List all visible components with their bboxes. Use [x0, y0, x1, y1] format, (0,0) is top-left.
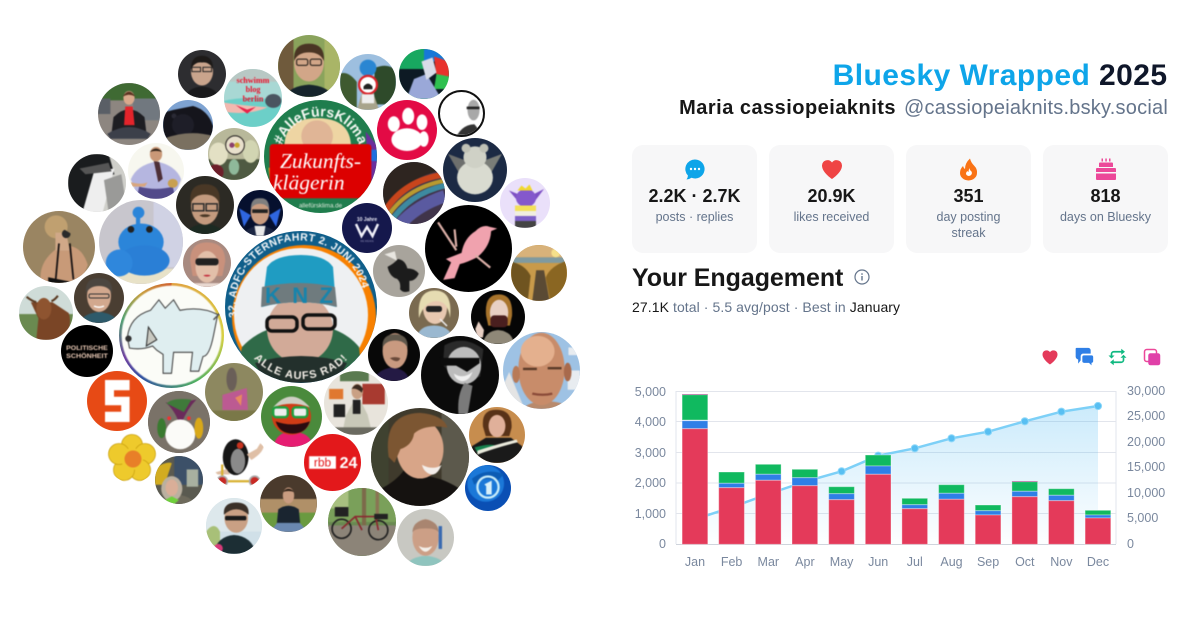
avatar: white bear with wings: [443, 138, 507, 202]
avatar: pink bird on black: [425, 205, 512, 292]
avatar: 10 Jahre W: [342, 203, 392, 253]
stacked bars: [682, 394, 1111, 544]
stat card: days on Bluesky: days on Bluesky: [1060, 210, 1151, 224]
avatar: vegetable face: [148, 391, 210, 453]
bar: Oct: [1012, 481, 1038, 544]
avatar: woman lying: [469, 407, 525, 463]
avatar: rbb24: rbb: [314, 455, 332, 469]
month labels: Feb: [721, 555, 742, 569]
avatar: dial with colours: [208, 128, 260, 180]
right axis labels: 15,000: [1127, 460, 1165, 474]
left axis labels: 2,000: [635, 476, 666, 490]
avatar: Politische Schoenheit: POLITISCHE: [66, 345, 108, 352]
bar: Mar: [755, 464, 781, 544]
left axis labels: 3,000: [635, 446, 666, 460]
avatar: window detail: [68, 154, 126, 212]
avatar: black panther: [163, 100, 213, 150]
avatar: Zukunftsklaegerin: #AlleFürsKlima: [274, 106, 366, 145]
month labels: May: [830, 555, 854, 569]
avatar: man sitting outside: [260, 475, 317, 532]
bar: Jul: [902, 498, 928, 544]
stat card: day posting streak: streak: [951, 226, 986, 240]
month labels: Sep: [977, 555, 999, 569]
bar: Sep: [975, 505, 1001, 544]
avatar: little mole on scooter: [211, 432, 267, 488]
stat card: likes received: [769, 145, 894, 253]
month labels: Apr: [795, 555, 815, 569]
month labels: Jul: [907, 555, 923, 569]
avatar: Zukunftsklaegerin: [264, 100, 377, 213]
avatar: man dark shirt: [368, 329, 420, 381]
avatar: purple goblin: [500, 178, 550, 228]
month labels: Jun: [868, 555, 888, 569]
avatar: avatar with mask: [471, 290, 525, 344]
avatar: bird in field with bag: [205, 363, 263, 421]
right axis labels: 25,000: [1127, 409, 1165, 423]
stat card: likes received: 20.9K: [807, 186, 856, 206]
left axis labels: 5,000: [635, 385, 666, 399]
avatar: Zukunftsklaegerin: Zukunfts-: [280, 149, 361, 173]
avatar: rbb24: 24: [340, 455, 357, 472]
avatar: schwimm blog berlin: berlin: [243, 94, 264, 103]
bar: Nov: [1048, 489, 1074, 544]
stat card: day posting streak: [906, 145, 1031, 253]
avatar: bald man sky: [503, 332, 580, 409]
bar: Jun: [865, 455, 891, 544]
avatar: woman green scarf: [155, 456, 203, 504]
avatar: black and white laughing woman: [421, 336, 499, 414]
chart legend: [1042, 348, 1160, 366]
stat card: posts and replies: [632, 145, 757, 253]
avatar: blue plush monster: [99, 200, 183, 284]
avatar: bike in woods: [328, 488, 396, 556]
avatar: sunset coast: [511, 245, 567, 301]
stat card: posts and replies: 2.2K · 2.7K: [648, 186, 741, 206]
avatar: woman in office: [324, 371, 388, 435]
avatar: man with blue lights: [237, 190, 283, 236]
avatar: paw logo: [377, 100, 437, 160]
avatar: man with glasses dark: [178, 50, 226, 98]
stat card: day posting streak: day posting: [937, 210, 1000, 224]
avatar: man with tie: [128, 143, 184, 199]
icon: flame: [960, 158, 977, 180]
avatar: man in forest: [278, 35, 340, 97]
icon: heart: [822, 160, 842, 179]
avatar: rbb24: [304, 434, 361, 491]
icon: replies legend: [1076, 348, 1094, 366]
avatar: schwimm blog berlin: blog: [246, 85, 260, 94]
avatar: highland cow: [19, 286, 73, 340]
stat card: days on Bluesky: [1043, 145, 1168, 253]
stat card: days on Bluesky: 818: [1090, 186, 1121, 206]
right axis labels: [1127, 384, 1165, 551]
stat card: day posting streak: 351: [953, 186, 984, 206]
grid lines: [676, 391, 1116, 544]
heading: Your Engagement: Your Engagement: [632, 264, 843, 292]
avatar: orange S logo: [87, 371, 147, 431]
stat card: likes received: likes received: [794, 210, 869, 224]
avatar: man grey hair: [74, 273, 124, 323]
left axis labels: 0: [659, 537, 666, 551]
panel: avatar bubble cluster: [19, 35, 580, 566]
icon: quotes legend: [1144, 348, 1160, 366]
month labels: [685, 555, 1109, 569]
right axis labels: 0: [1127, 537, 1134, 551]
avatar: main profile picture: ALLE AUFS RAD!: [254, 354, 348, 380]
month labels: Aug: [940, 555, 963, 569]
left axis labels: 1,000: [635, 507, 666, 521]
bar: Apr: [792, 469, 818, 544]
icon: chat bubble: [685, 160, 705, 180]
month labels: Dec: [1087, 555, 1109, 569]
bar: Aug: [939, 485, 964, 544]
title: Bluesky Wrapped 2025: [833, 59, 1168, 92]
avatar: road sign: [340, 54, 396, 110]
month labels: Oct: [1015, 555, 1035, 569]
icon: likes legend: [1042, 350, 1058, 364]
right axis labels: 30,000: [1127, 384, 1165, 398]
avatar: tagesschau globe: [465, 465, 511, 511]
avatar: 10 Jahre W: 10 Jahre: [357, 217, 377, 223]
avatar: main profile picture: 32. ADFC-STERNFAHRT 2. JUNI 2024: [227, 232, 370, 318]
bar: Jan: [682, 394, 708, 544]
month labels: Nov: [1050, 555, 1073, 569]
avatar: rainbow: [383, 162, 445, 224]
chart: monthly engagement stacked bars with cumulative line: [635, 384, 1165, 569]
month labels: Mar: [758, 555, 779, 569]
icon: info: [854, 269, 870, 285]
left axis labels: 4,000: [635, 415, 666, 429]
avatar: woman with sunglasses: [183, 239, 231, 287]
engagement summary: 27.1K total · 5.5 avg/post · Best in January: [632, 299, 900, 315]
icon: birthday cake: [1096, 158, 1116, 180]
cumulative area: [695, 406, 1098, 544]
left axis labels: [635, 385, 666, 551]
icon: reposts legend: [1108, 348, 1126, 366]
avatar: woman short hair black turtleneck: [371, 408, 469, 506]
avatar: main profile picture: KNZ: [265, 283, 333, 308]
avatar: orange muppet: [261, 386, 322, 447]
avatar: 10 Jahre W: WE WEAVE: [360, 240, 374, 243]
avatar: Zukunftsklaegerin: allefürsklima.de: [299, 202, 343, 209]
avatar: woman from behind: [23, 211, 95, 283]
avatar: colourful woman art: [399, 49, 449, 99]
avatar: Politische Schoenheit: SCHÖNHEIT: [66, 351, 109, 360]
bar: May: [829, 487, 854, 544]
avatar: main profile picture: [225, 231, 377, 383]
bar: Dec: [1085, 510, 1111, 544]
month labels: Jan: [685, 555, 705, 569]
avatar: schwimm blog berlin: schwimm: [237, 76, 270, 85]
avatar: man sunglasses outdoors: [206, 498, 262, 554]
right axis labels: 20,000: [1127, 435, 1165, 449]
user name and handle: Maria cassiopeiaknits @cassiopeiaknits.bsky.social: [679, 97, 1168, 119]
avatar: smiling bald man: [397, 509, 454, 566]
right axis labels: 5,000: [1127, 511, 1158, 525]
avatar: flower: [107, 433, 157, 483]
avatar: Zukunftsklaegerin: klägerin: [273, 170, 345, 194]
bar: Feb: [719, 472, 744, 544]
right axis labels: 10,000: [1127, 486, 1165, 500]
cumulative line: [695, 402, 1102, 519]
avatar: black shape on glitter: [373, 245, 425, 297]
avatar: blonde with cigarette: [409, 288, 459, 338]
avatar: schwimm blog berlin: [224, 69, 282, 127]
avatar: rainbow-ring dog drawing: [119, 283, 224, 388]
avatar: woman sitting on street: [98, 83, 160, 145]
avatar: Politische Schoenheit: [61, 325, 113, 377]
avatar: black ring portrait: [438, 90, 485, 137]
stat card: posts and replies: posts · replies: [656, 210, 733, 224]
avatar: man beard glasses: [176, 176, 234, 234]
